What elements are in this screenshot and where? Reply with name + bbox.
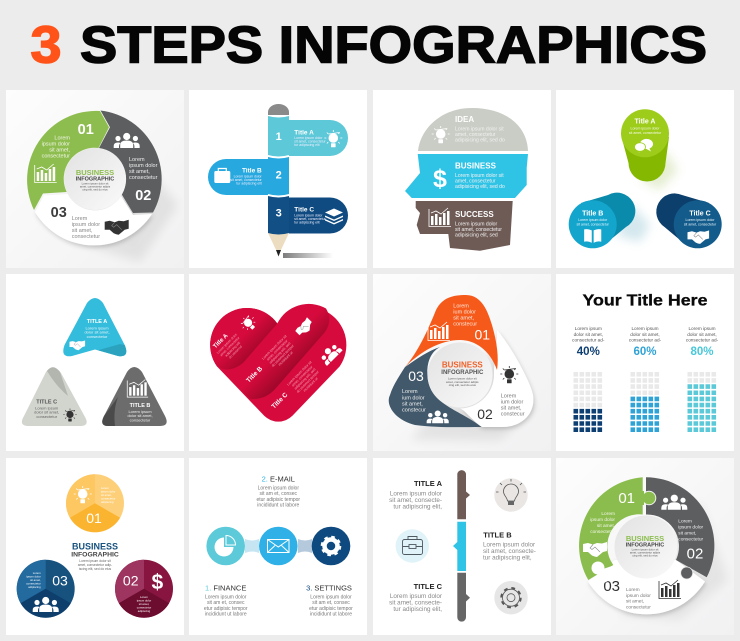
center label [64,148,126,210]
heart base: title C: do eiusmod tempor [296,369,320,394]
cylinder C: Title C [689,210,711,217]
finance text [204,584,248,618]
center label: cing elit, sed do eius [82,188,108,192]
email text: sit am et, consec [260,491,298,497]
head section: idea: adipisicing elit, sed do [455,138,505,144]
triangle A: Lorem ipsum [85,326,109,330]
cylinder B [569,193,635,248]
heading: Your Title Here [582,292,708,310]
title A [389,479,443,510]
swirl: dark 03: constecur [402,408,426,414]
puzzle: white 03: 03 [603,578,620,595]
circle 02: consectetur [137,606,151,610]
head section: business: amet, consectetur [455,178,496,184]
column 40% [572,326,605,432]
swirl: white 02: constecur [501,412,525,418]
dark segment 02: ipsum dolor [129,163,158,169]
title A: Lorem ipsum dolor [390,490,442,498]
column 60%: 60% [633,346,657,358]
column 40%: Lorem ipsum [575,326,602,331]
center label: Lorem ipsum dolor sit [82,182,109,186]
puzzle: green 01: ipsum dolor [590,517,615,523]
center label: BUSINESS [72,542,118,552]
heart band: title A: Title A [213,333,230,350]
triangle B: consectetur [130,418,151,422]
puzzle: dark 02: ipsum dolor [678,524,703,530]
circle 02: ipsum dolor [137,598,151,602]
dark segment 02: 02 [135,188,151,204]
center label: INFOGRAPHIC [626,542,664,548]
triangle A: dolor sit amet, [84,330,110,335]
heart band: title A [210,308,277,370]
swirl: white 02: Lorem [501,394,517,400]
heart band: title B: incididunt ut [278,351,294,367]
settings text: etur adipisic tempor [309,606,353,612]
panel: green arrow ring [6,90,184,268]
column 80%: dolor sit amet, [687,332,717,337]
puzzle: dark 02: Lorem [678,518,692,524]
head section: success: SUCCESS [455,210,494,219]
circle 03: Lorem [33,571,41,575]
finance circle with pie icon [206,527,245,565]
panel: heart [189,274,367,451]
center label: INFOGRAPHIC [71,552,119,558]
pencil shadow [283,253,333,258]
triangle B: TITLE B [130,403,150,409]
cylinder A: Lorem ipsum dolor [631,127,660,131]
puzzle: green 01 [579,477,656,585]
column 60% [629,326,662,432]
panel: rounded triangles [6,274,184,451]
green segment 01 [27,111,109,210]
triangle A [63,298,126,356]
white segment 03: consectetur [72,234,100,240]
triangle A: consectetur [87,334,108,339]
column 80%: consectetur ad- [686,337,719,342]
triangle B: dolor sit amet, [127,413,153,418]
column 60%: dolor sit amet, [630,332,660,337]
finance text: 1. FINANCE [205,584,246,592]
timeline bar [453,470,470,622]
title A: tur adipiscing elit, [393,504,442,510]
cylinder C: Lorem ipsum dolor [686,218,715,222]
tab B: sit amet, consectetur [230,178,263,182]
center label: Lorem ipsum dolor sit [632,548,659,552]
puzzle: green 01: sit amet, [597,523,615,529]
center label: amet, consectetur adipis [630,550,661,554]
white segment 03: 03 [51,205,67,221]
title B: tur adipiscing elit, [483,554,532,562]
circle 01: ipsum dolor [101,490,116,494]
pencil body: 3 [276,208,282,220]
cylinder A [621,109,669,182]
triangle B: Lorem ipsum [128,409,152,414]
heart band: title A: Lorem ipsum dolor [216,332,239,355]
tab A: Lorem ipsum dolor [294,136,323,140]
icon: briefcase [396,529,429,563]
cylinder shadows [615,150,678,242]
cylinder B: sit amet, consectetur [577,222,610,226]
finance text: incididunt ut labore [205,612,247,618]
green segment 01: consectetur [42,154,70,160]
finance text: etur adipisic tempor [204,606,248,612]
heart band: title A: adipiscing elit [224,341,241,358]
heart band: title B: Title B [245,365,264,384]
cylinder C: sit amet, consectetur [684,222,717,226]
puzzle: white 03: Lorem [626,587,640,593]
settings text: Lorem ipsum dolor [310,594,352,600]
swirl: orange 01: 01 [475,326,490,342]
triangle C: dolor sit amet, [34,410,59,415]
tab A: sit amet, consectetur [294,140,326,144]
center label: Lorem ipsum dolor sit [79,559,111,563]
column 80%: Lorem ipsum [688,326,716,331]
swirl: orange 01 [405,295,498,370]
center label: BUSINESS [626,534,664,543]
swirl: orange 01: sit amet, [453,316,475,322]
triangle B [102,367,167,426]
column 40%: 40% [577,346,600,358]
swirl: dark 03: ium dolor [402,396,425,402]
panel: swirl triangle [373,274,551,451]
settings text: sit am et, consec [312,600,350,606]
cylinder B: Title B [582,210,603,217]
center label: BUSINESS [442,361,483,370]
tab A: Title A [294,129,314,136]
title C: TITLE C [414,582,443,591]
head section: business: $ [433,165,447,193]
tab C: sit amet, consectetur [294,217,326,221]
puzzle: green 01: consectetur [590,529,615,535]
circle 02: 02 [123,573,139,589]
panel: connected circles [189,458,367,635]
dark segment 02: consectetur [129,175,158,181]
tab C [289,198,348,234]
circle 03 [17,560,75,618]
puzzle: dark 02: 02 [687,546,703,562]
head section: idea [418,108,528,151]
circle 01: 01 [86,510,102,526]
heart band: title B: adipiscing elit, sed [268,341,292,365]
triangle C [22,367,87,426]
white segment 03 [35,194,152,245]
panel: percent grids [556,274,734,451]
head section: business: BUSINESS [455,162,497,170]
tab C: Lorem ipsum dolor [294,213,323,217]
green segment 01: sit amet, [49,148,70,154]
cylinder A: Title A [634,118,656,125]
title B: TITLE B [483,530,512,540]
heart base: title C: Lorem ipsum dolor sit [286,360,313,387]
heart base: title C: incididunt ut [303,377,319,393]
email circle with envelope icon [259,527,298,565]
head section: idea: Lorem ipsum dolor sit [455,126,504,132]
dark segment 02: sit amet, [129,169,150,175]
cylinder B: Lorem ipsum dolor [578,218,608,222]
swirl: white 02: sit amet, [501,406,522,412]
title: STEPS INFOGRAPHICS [80,16,707,74]
panel: three sector circles [6,458,184,635]
circle 03: 03 [52,573,68,589]
puzzle: dark 02: consectetur [678,536,703,542]
green segment 01: ipsum dolor [42,142,70,148]
center label [614,516,678,578]
heart base: title C: Title C [270,391,290,410]
circle 01: sit amet, [101,493,112,497]
puzzle: dark 02: sit amet, [678,530,696,536]
circle 03: ipsum dolor [26,574,41,578]
title C: tur adipiscing elit, [393,606,442,613]
circle 01: Lorem [101,486,110,490]
column 60%: Lorem ipsum [631,326,659,331]
tab A [289,120,348,156]
finance text: sit am et, consec [207,600,245,606]
panel: cylinders [556,90,734,268]
center label [428,342,492,408]
dark segment 02 [99,110,162,213]
column 60%: consectetur ad- [629,337,662,342]
panel: head [373,90,551,268]
puzzle: dark 02 [646,477,714,579]
title B: Lorem ipsum dolor [483,542,535,548]
cylinder A: sit amet, consectetur [629,131,662,135]
circle 03: adipiscing [28,585,41,589]
white segment 03: sit amet, [72,228,93,234]
title B [483,530,536,562]
heart band: title A: amet, consectetur [219,335,241,357]
center label: BUSINESS [76,168,114,177]
circle 02 [115,560,173,618]
center label: cing elit, sed do eius [449,383,476,387]
icon: gear [494,581,528,614]
swirl: white 02 [460,330,533,427]
center label: INFOGRAPHIC [441,370,484,376]
heart base: title C: adipiscing elit, sed [293,367,317,391]
heart band: title B [217,304,329,399]
settings text: 3. SETTINGS [306,584,352,592]
puzzle: white 03: ipsum dolor [626,593,651,599]
icon: bulb [494,478,528,512]
title: 3 [30,16,62,74]
swirl: orange 01: constecur [453,322,477,328]
heart band: title B: Lorem ipsum dolor sit [261,334,288,361]
green segment 01: Lorem [54,136,70,142]
swirl: orange 01: ium dolor [453,310,476,316]
head section: success [416,201,513,251]
tab C: tur adipiscing elit [294,220,320,224]
settings text: incididunt ut labore [310,612,352,618]
column 80%: 80% [690,346,714,358]
puzzle: green 01: Lorem [601,511,615,517]
circle 02: $ [151,571,163,594]
email text: incididunt ut labore [257,502,299,508]
puzzle: white 03: sit amet, [626,598,644,604]
swirl: dark 03: Lorem [402,389,418,395]
title C: sit amet, consecte- [389,600,442,606]
center label: Lorem ipsum dolor sit [448,376,477,380]
heart band: title B: do eiusmod tempor [271,343,295,368]
puzzle: white 03: consectetur [626,604,651,610]
email text: Lorem ipsum dolor [258,486,299,492]
dark segment 02: Lorem [129,157,145,163]
green segment 01: 01 [78,122,94,138]
pencil body: 1 [276,131,282,143]
circle 02: sit amet, [139,602,150,606]
finance text: Lorem ipsum dolor [205,594,247,600]
swirl: dark 03: sit amet, [402,402,423,408]
center label: amet, consectetur adipis [446,380,479,384]
center label: amet, consectetur adipis [80,184,111,188]
email text [256,474,300,508]
center label [71,542,119,571]
column 40%: dolor sit amet, [574,332,603,337]
head section: business: adipisicing elit, sed do [455,184,505,190]
head section: success: sit amet, consectetur [455,227,502,233]
tab A: tur adipiscing elit [294,143,320,147]
pencil body [268,104,289,256]
head section: idea: amet, consectetur [455,132,496,138]
center label: INFOGRAPHIC [76,176,114,182]
circle 03: consectetur [26,582,41,586]
swirl: dark 03: 03 [408,368,424,384]
title C [389,582,443,613]
circle 01: consectetur [101,496,116,500]
panel: pencil [189,90,367,268]
title C: Lorem ipsum dolor [390,593,442,600]
email text: etur adipisic tempor [256,497,300,503]
connectors [245,539,312,553]
cylinder C [656,193,722,248]
triangle A: TITLE A [87,319,107,325]
tab B: tur adipiscing elit [236,182,262,186]
swirl: orange 01: Lorem [453,304,469,310]
puzzle: green 01: 01 [618,490,635,507]
title B: sit amet, consecte- [483,548,536,555]
center label: iscing elit, sed do eius [79,567,111,571]
column 80% [686,326,719,432]
triangle C: consectetur [36,414,58,419]
white segment 03: Lorem [72,216,88,222]
panel: puzzle ring [556,458,734,635]
circle 01 [66,474,124,532]
head section: business [405,154,528,198]
head section: success: Lorem ipsum dolor [455,222,497,228]
swirl: white 02: ium dolor [501,400,523,406]
tab B: Title B [242,168,262,175]
center label: cing elit, sed do eius [632,554,658,558]
tab B: Lorem ipsum dolor [234,174,263,178]
head section: business: Lorem ipsum dolor sit [455,173,504,179]
column 40%: consectetur ad- [572,337,605,342]
heart base: title C: amet, consectetur [291,364,314,387]
head section: success: adipisicing elit, sed [455,232,498,238]
triangle C: Lorem ipsum [35,406,59,410]
settings circle with gear icon [312,527,350,565]
title A: TITLE A [414,479,443,488]
center label: amet, consectetur adip- [78,563,112,567]
circle 03: sit amet, [30,578,41,582]
head section: idea: IDEA [455,115,474,124]
swirl: dark 03 [389,347,482,427]
heart band: title A: do eiusmod [228,345,243,360]
heart band: title B: amet, consectetur [266,338,289,361]
title A: sit amet, consecte- [389,497,442,504]
settings text [306,584,353,618]
email text: 2. E-MAIL [262,474,295,484]
tab B [208,159,268,195]
circle 02: adipiscing [138,609,151,613]
circle 01: adipiscing [101,500,114,504]
white segment 03: ipsum dolor [72,222,100,228]
puzzle: white 03 [588,560,705,614]
swirl: white 02: 02 [477,406,493,422]
tab C: Title C [294,207,314,214]
pencil body: 2 [276,170,282,182]
heart base: title C [210,307,346,422]
panel: vertical timeline [373,458,551,635]
circle 02: Lorem [140,595,149,599]
triangle C: TITLE C [36,399,57,405]
